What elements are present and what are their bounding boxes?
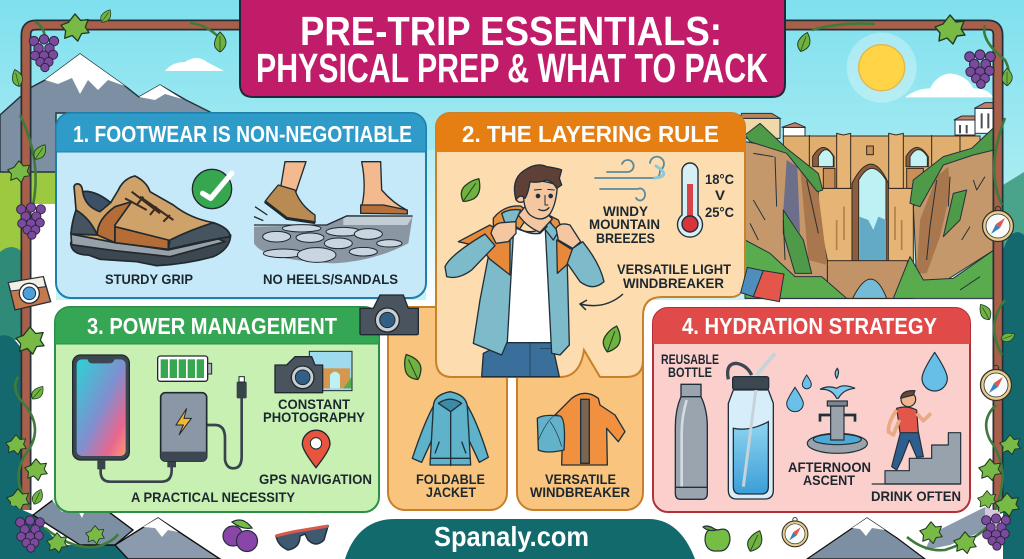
icon: wind <box>595 157 664 200</box>
label: reusable bottle: BOTTLE <box>668 364 712 380</box>
label: versatile windbreaker: VERSATILE <box>545 471 616 487</box>
icon: water bottle with straw <box>728 353 775 499</box>
label: versatile windbreaker: WINDBREAKER <box>530 484 630 500</box>
label: foldable jacket <box>416 471 485 500</box>
icon: green apple <box>703 526 730 551</box>
icon: fountain <box>807 368 867 453</box>
label: windy mountain breezes: MOUNTAIN <box>589 216 660 232</box>
label: reusable bottle: REUSABLE <box>661 351 719 367</box>
icon: plums <box>223 520 258 552</box>
label: afternoon ascent: ASCENT <box>803 472 855 488</box>
label: no heels: NO HEELS/SANDALS <box>263 271 398 287</box>
label: windy mountain breezes <box>589 203 660 246</box>
panel 1: footwear <box>56 113 426 298</box>
heading: 4. HYDRATION STRATEGY <box>682 313 937 339</box>
title line 1: PRE-TRIP ESSENTIALS: <box>300 8 722 54</box>
icon: foldable jacket <box>412 392 488 466</box>
panel: foldable jacket <box>388 307 507 510</box>
Ronda bridge scene <box>740 33 994 298</box>
label: windy mountain breezes: WINDY <box>603 203 649 219</box>
label: practical necessity: A PRACTICAL NECESSITY <box>131 489 296 505</box>
icon: camera with photo <box>275 351 352 393</box>
label: afternoon ascent <box>788 459 871 488</box>
icon: hiking boot <box>71 176 231 266</box>
icon: steel bottle <box>675 384 707 499</box>
icon: thermometer <box>678 163 702 237</box>
icon: leaf lower <box>600 323 624 355</box>
bottom icons <box>223 518 808 554</box>
heading: 2. THE LAYERING RULE <box>462 121 719 147</box>
label: versatile light windbreaker <box>617 261 731 291</box>
label: temperature range: 18°C <box>705 171 734 187</box>
label: reusable bottle <box>661 351 719 380</box>
gorge left cliff <box>745 123 847 298</box>
icon: leaf <box>399 351 425 383</box>
icon: windbreaker with pouch <box>537 393 625 465</box>
icon: leaf <box>457 174 486 206</box>
icon: person climbing stairs with drop <box>872 352 961 484</box>
arrow to jacket <box>580 294 623 310</box>
panel 3: power management <box>55 307 379 512</box>
label: foldable jacket: JACKET <box>426 484 476 500</box>
panel 4: hydration <box>653 308 970 512</box>
gorge right cliff <box>893 127 994 298</box>
icon: feet on cobblestones <box>254 162 413 263</box>
buildings <box>740 103 994 138</box>
camera on panel corner <box>360 295 418 335</box>
label: constant photography <box>263 396 366 425</box>
icon: power bank and cables <box>97 377 247 482</box>
camera left edge <box>8 277 51 310</box>
compass right lower <box>980 365 1012 400</box>
icon: leaf <box>745 528 766 554</box>
bottom: teal footer and mountains <box>0 485 1010 559</box>
label: afternoon ascent: AFTERNOON <box>788 459 871 475</box>
label: temperature range <box>705 171 734 220</box>
label: versatile light windbreaker: VERSATILE LIGHT <box>617 261 731 277</box>
title line 2: PHYSICAL PREP & WHAT TO PACK <box>256 45 768 91</box>
label: versatile light windbreaker: WINDBREAKER <box>623 275 724 291</box>
bridge <box>783 133 980 298</box>
mountains top-left <box>0 54 224 172</box>
icon: battery level <box>158 356 212 381</box>
icon: compass <box>782 518 808 547</box>
sun <box>847 33 917 103</box>
label: temperature range: 25°C <box>705 204 734 220</box>
label: windy mountain breezes: BREEZES <box>596 230 655 246</box>
icon: smartphone <box>73 355 129 460</box>
compass right upper <box>982 206 1014 242</box>
label: temperature range: V <box>715 187 726 203</box>
cloud <box>905 73 993 97</box>
panel: versatile windbreaker <box>517 345 643 510</box>
label: gps navigation: GPS NAVIGATION <box>259 471 372 487</box>
footer brand text: Spanaly.com <box>434 521 589 552</box>
heading: 3. POWER MANAGEMENT <box>87 313 337 339</box>
label: drink often: DRINK OFTEN <box>871 488 961 504</box>
icon: sunglasses <box>276 526 328 550</box>
label: constant photography: PHOTOGRAPHY <box>263 409 366 425</box>
icon: water drops small <box>787 375 811 412</box>
label: versatile windbreaker <box>530 471 630 500</box>
person in windbreaker <box>445 165 604 377</box>
panel 2: layering rule <box>436 113 745 377</box>
label: foldable jacket: FOLDABLE <box>416 471 485 487</box>
label: constant photography: CONSTANT <box>278 396 350 412</box>
title banner <box>240 0 785 97</box>
icon: map pin <box>302 430 330 468</box>
icon: green check <box>192 169 232 209</box>
heading: 1. FOOTWEAR IS NON-NEGOTIABLE <box>73 121 412 147</box>
icon: packed pouch <box>741 267 784 302</box>
label: sturdy grip: STURDY GRIP <box>105 271 193 287</box>
